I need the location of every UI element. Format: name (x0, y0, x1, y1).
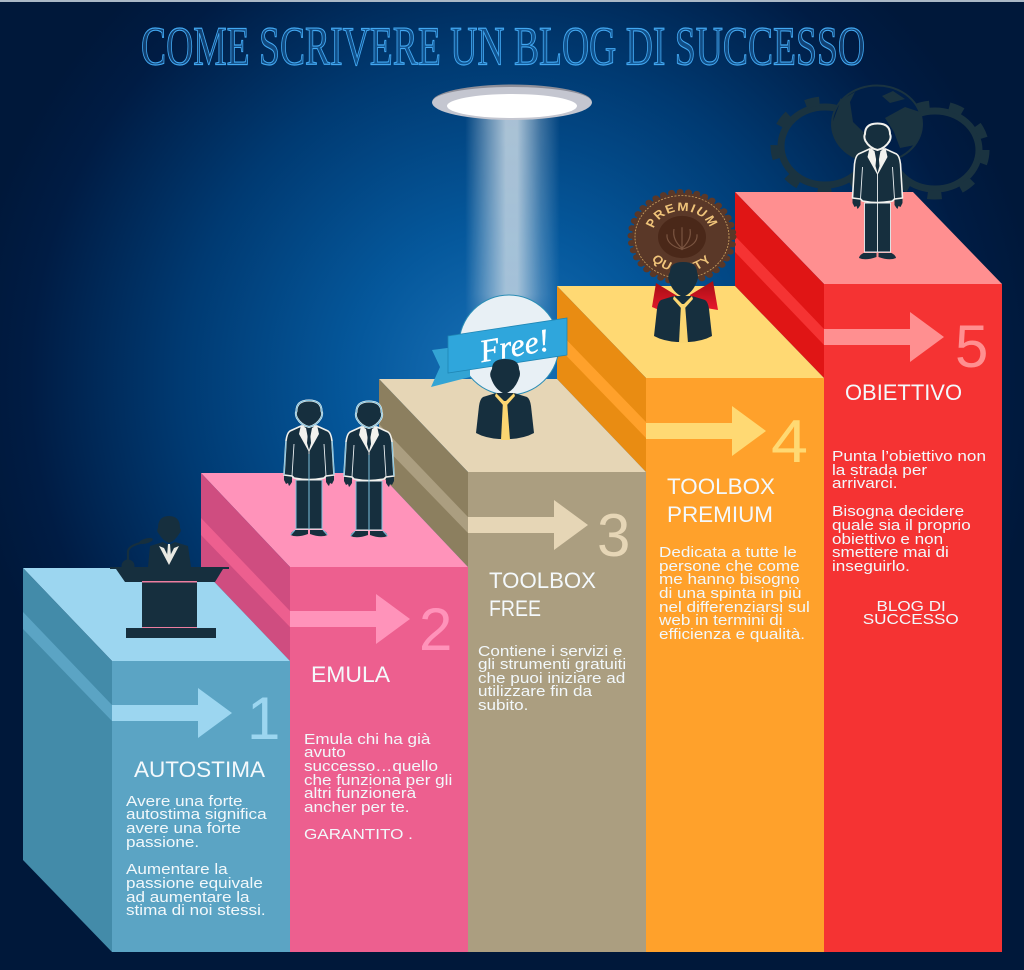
icon: premium seal (628, 189, 736, 310)
text: autostima: avere una forte (126, 820, 241, 837)
step 1: autostima (23, 568, 290, 952)
text: toolbox free: gli strumenti gratuiti (478, 656, 626, 673)
number 4: 4 (771, 408, 808, 475)
text: obiettivo: smettere mai di (832, 544, 949, 561)
text: obiettivo (832, 448, 986, 628)
number 2: 2 (419, 596, 452, 663)
icon: premium seal: QUALITY (653, 254, 710, 270)
icon: businessman on goal (852, 124, 902, 259)
text: emula: GARANTITO . (304, 826, 413, 843)
text: obiettivo: arrivarci. (832, 475, 898, 492)
text: toolbox premium: di una spinta in più (659, 585, 802, 602)
text: obiettivo: la strada per (832, 462, 928, 479)
text: autostima: Aumentare la (126, 861, 228, 878)
text: toolbox premium: efficienza e qualità. (659, 626, 805, 643)
icon: two businessmen (284, 400, 394, 537)
icon: premium seal: PREMIUM (646, 202, 718, 228)
step 4: toolbox premium (557, 286, 824, 952)
arrow 4 (646, 406, 766, 456)
text: toolbox free: subito. (478, 697, 528, 714)
text: toolbox premium: web in termini di (658, 612, 783, 629)
step 5: obiettivo (735, 192, 1002, 952)
text: autostima: Avere una forte (126, 793, 243, 810)
text: autostima: ad aumentare la (126, 889, 250, 906)
text: toolbox free: che puoi iniziare ad (478, 670, 625, 687)
text: toolbox premium (658, 544, 810, 643)
text: autostima: autostima significa (126, 806, 267, 823)
man left (284, 400, 334, 536)
icon: free badge (431, 295, 567, 395)
icon: person premium (654, 262, 712, 343)
icon: person free (476, 359, 534, 440)
arrow 1 (112, 688, 232, 738)
text: toolbox premium: nel differenziarsi sul (659, 599, 810, 616)
icon: gears and globe (775, 86, 985, 195)
heading: toolbox premium: TOOLBOX (667, 474, 775, 499)
number 3: 3 (597, 502, 630, 569)
text: toolbox premium: me hanno bisogno (659, 571, 800, 588)
text: obiettivo: Punta l’obiettivo non (832, 448, 986, 465)
heading: toolbox free (489, 568, 596, 621)
text: obiettivo: obiettivo e non (832, 531, 943, 548)
text: emula: successo…quello (304, 758, 438, 775)
arrow 2 (290, 594, 410, 644)
heading: toolbox free: FREE (489, 596, 541, 621)
text: obiettivo: quale sia il proprio (832, 517, 971, 534)
text: autostima: passione. (126, 834, 199, 851)
text: emula: Emula chi ha già (304, 731, 430, 748)
number 5: 5 (955, 313, 988, 380)
text: obiettivo: SUCCESSO (863, 611, 959, 628)
text: autostima: stima di noi stessi. (126, 902, 266, 919)
text: obiettivo: inseguirlo. (832, 558, 910, 575)
man right (344, 402, 394, 537)
text: toolbox free: utilizzare fin da (478, 683, 592, 700)
light beam (467, 117, 557, 320)
text: toolbox premium: persone che come (659, 558, 800, 575)
heading: obiettivo: OBIETTIVO (845, 380, 962, 405)
heading: emula: EMULA (311, 662, 390, 687)
arrow 3 (468, 500, 588, 550)
text: emula: altri funzionerà (304, 785, 416, 802)
number 1: 1 (247, 685, 280, 752)
heading: toolbox premium (667, 474, 775, 527)
step 2: emula (201, 473, 468, 952)
text: autostima: passione equivale (126, 875, 263, 892)
icon: ceiling lamp (432, 84, 592, 120)
text: emula: avuto (304, 744, 346, 761)
text: toolbox free: Contiene i servizi e (478, 643, 622, 660)
text: emula (304, 731, 452, 843)
text: autostima (126, 793, 267, 919)
heading: toolbox free: TOOLBOX (489, 568, 596, 593)
text: emula: che funziona per gli (304, 772, 452, 789)
heading: toolbox premium: PREMIUM (667, 502, 773, 527)
step 3: toolbox free (379, 379, 646, 952)
text: emula: ancher per te. (304, 799, 409, 816)
heading: autostima: AUTOSTIMA (134, 757, 265, 782)
arrow 5 (824, 312, 944, 362)
icon: podium speaker (110, 516, 229, 638)
text: obiettivo: BLOG DI (876, 598, 946, 615)
text: toolbox free (478, 643, 626, 714)
text: toolbox premium: Dedicata a tutte le (659, 544, 797, 561)
text: obiettivo: Bisogna decidere (832, 503, 964, 520)
icon: free badge: Free! (476, 322, 552, 369)
